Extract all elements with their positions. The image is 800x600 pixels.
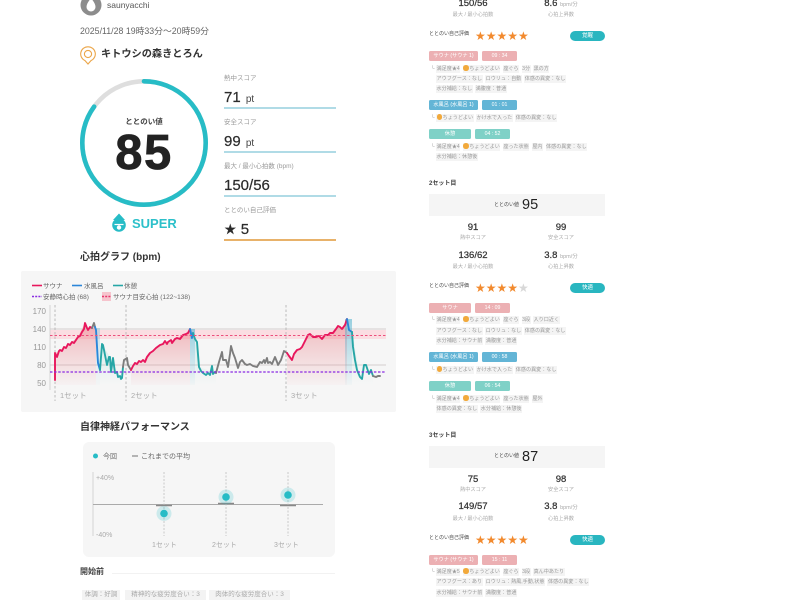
panel: set 1 details: ちょうどよい (469, 66, 500, 72)
panel: set 1 details: 体感の異変：なし (516, 115, 557, 121)
panel: set 1 details: └ (431, 66, 435, 72)
panel: set 1 details: 座ぐら (503, 66, 519, 72)
y axis labels (33, 307, 47, 388)
badge: SUPER rank: SUPER (132, 216, 177, 231)
tags: condition before start: 体調：好調 (85, 591, 117, 598)
panel: set 2 details: 休憩 (445, 383, 455, 389)
panel: set 3 details: 心拍上昇数 (548, 516, 574, 522)
panel: set 2 details: 06 : 54 (485, 383, 500, 389)
y axis labels: 170 (33, 307, 47, 316)
panel: set 3 details: └ (431, 569, 435, 575)
panel: set 3 details: 満足度★5 (437, 569, 460, 575)
heading: autonomic nerve performance: 自律神経パフォーマンス (80, 422, 190, 433)
chart legend: サウナ (43, 282, 62, 290)
chart legend (93, 452, 190, 460)
chart legend: 安静時心拍 (68) (43, 292, 89, 301)
score: 熱中スコア (224, 74, 336, 109)
panel: set 3 details: 快適 (582, 536, 593, 542)
score: 安全スコア: 安全スコア (224, 119, 256, 126)
panel: set 1 details: 満足度★4 (437, 66, 460, 72)
panel: set 1 details: 04 : 52 (485, 131, 500, 137)
panel: set 2 details: ロウリュ：なし (486, 328, 521, 334)
y axis labels: 110 (33, 343, 47, 352)
panel: set 1 details: 水分補給：休憩後 (436, 154, 477, 160)
score: 熱中スコア: 熱中スコア (224, 75, 256, 82)
panel: set 1 details: 3分 (522, 66, 530, 72)
panel: set 2 details: ちょうどよい (469, 317, 500, 323)
panel: set 3 details: 3.8 bpm/分 (544, 501, 578, 512)
panel: set 1 details: 体感の異変：なし (546, 144, 587, 150)
panel: set 3 details: ととのい値 (494, 453, 519, 459)
panel: set 2 details: 満腹度：普通 (486, 338, 516, 344)
panel: set 2 details: 136/62 (458, 250, 488, 261)
panel: set 3 details: 真ん中あたり (534, 569, 564, 575)
panel: set 1 details: ちょうどよい (443, 115, 473, 121)
panel: set 1 details: 満足度★4 (437, 144, 460, 150)
panel: set 3 details: 98 (556, 474, 566, 485)
panel: set 2 details: 水風呂 (水風呂 1) (433, 354, 474, 360)
score: self rating: ★ 5 (224, 221, 249, 238)
panel: set 2 details: └ (431, 396, 435, 402)
panel: autonomic performance chart (83, 442, 335, 557)
y axis labels: 140 (33, 325, 47, 334)
score: self rating (224, 206, 336, 241)
panel: set 1 details: └ (431, 115, 435, 121)
score: 熱中スコア: 71 pt (224, 89, 254, 106)
score: max/min heart rate: 最大 / 最小心拍数 (bpm) (224, 163, 294, 170)
panel: set 2 details: 体感の異変：なし (436, 406, 477, 412)
panel: set 3 details: 15 : 11 (492, 557, 507, 563)
panel: set 2 details: 99 (556, 222, 566, 233)
panel: set 1 details (429, 0, 605, 161)
panel: set 3 details: ロウリュ：熱風,手動,状態 (486, 579, 544, 585)
panel: set 3 details: サウナ (サウナ 1) (433, 557, 474, 563)
panel: set 3 details: 3セット目 (429, 433, 456, 439)
area fills under sauna segments (55, 319, 373, 385)
panel: set 2 details: 14 : 09 (485, 305, 500, 311)
panel: set 2 details: 心拍上昇数 (548, 264, 574, 270)
panel: set 2 details: 3.8 bpm/分 (544, 250, 578, 261)
set labels: 3セット (291, 391, 318, 400)
panel: set 2 details: 最大 / 最小心拍数 (453, 264, 493, 270)
panel: set 1 details: ととのい自己評価 (429, 31, 469, 37)
chart legend: これまでの平均 (141, 452, 190, 460)
score: 安全スコア (224, 118, 336, 153)
panel: set 2 details: アウフグース：なし (436, 328, 482, 334)
panel: set 2 details: 91 (468, 222, 478, 233)
panel: set 1 details: 黒の方 (534, 66, 549, 72)
panel: set 3 details: 75 (468, 474, 478, 485)
score: 安全スコア: 99 pt (224, 133, 254, 150)
panel: set 1 details: 01 : 01 (492, 102, 507, 108)
panel: set 2 details: 3段 (522, 317, 530, 323)
panel: set 1 details: 満腹度：普通 (476, 86, 506, 92)
score: max/min heart rate (224, 162, 336, 197)
axis labels: -40% (96, 532, 112, 539)
panel: set 2 details: サウナ (442, 305, 458, 311)
gauge: overall score 85: 85 (115, 126, 173, 180)
panel: set 1 details: アウフグース：なし (436, 76, 482, 82)
gauge: overall score 85: ととのい値 (125, 117, 163, 126)
gauge: overall score 85 (80, 79, 208, 207)
panel: set 3 details: ★★★★★ (475, 532, 529, 546)
panel: set 2 details: 入り口近く (534, 317, 559, 323)
panel: set 1 details: 水風呂 (水風呂 1) (433, 102, 474, 108)
badge: SUPER rank (112, 214, 177, 232)
panel: set 1 details: 休憩 (445, 131, 455, 137)
tags: condition before start (82, 590, 290, 600)
tags: condition before start: 肉体的な疲労度合い：3 (215, 591, 284, 598)
panel: set 3 details: 3段 (522, 569, 530, 575)
axis labels: 1セット (152, 541, 177, 549)
panel: set 3 details: 最大 / 最小心拍数 (453, 516, 493, 522)
axis labels: +40% (96, 475, 114, 482)
panel: set 2 details: 安全スコア (548, 235, 574, 241)
panel: set 3 details: 体感の異変：なし (548, 579, 589, 585)
set labels: 1セット (60, 391, 87, 400)
target heart rate band (50, 330, 386, 339)
panel: set 1 details: ちょうどよい (469, 144, 500, 150)
score: max/min heart rate: 150/56 (224, 177, 270, 194)
panel: set 1 details: 体感の異変：なし (525, 76, 566, 82)
panel: set 1 details: ロウリュ：自動 (486, 76, 521, 82)
panel: set 1 details: └ (431, 144, 435, 150)
axis labels: 2セット (212, 541, 237, 549)
panel: set 3 details (429, 432, 605, 597)
panel: set 3 details: 安全スコア (548, 487, 574, 493)
target and resting dashed lines (50, 334, 386, 336)
panel: set 2 details: 座った状態 (503, 396, 529, 402)
panel: set 2 details: ととのい自己評価 (429, 283, 469, 289)
panel: set 2 details: 屋外 (532, 396, 543, 402)
panel: set 2 details: 水分補給：休憩後 (481, 406, 522, 412)
panel: set 2 details: 00 : 58 (492, 354, 507, 360)
panel: set 3 details: 87 (522, 448, 538, 464)
panel: set 2 details: └ (431, 317, 435, 323)
y axis labels: 50 (37, 379, 47, 388)
panel: set 3 details: 149/57 (458, 501, 488, 512)
axis labels: 3セット (274, 541, 299, 549)
panel: set 2 details: ちょうどよい (469, 396, 500, 402)
axis labels (96, 475, 299, 549)
score: self rating: ととのい自己評価 (224, 207, 276, 214)
heading: heart rate graph: 心拍グラフ (bpm) (80, 252, 161, 263)
heart rate lines (55, 319, 380, 380)
average markers (156, 504, 296, 506)
panel: set 3 details: 水分補給：サウナ前 (436, 590, 482, 596)
panel: set 3 details: ちょうどよい (469, 569, 500, 575)
panel: set 1 details: 水分補給：なし (436, 86, 472, 92)
panel: set 1 details: かけ水で入った (477, 115, 512, 121)
panel: set 2 details: 体感の異変：なし (525, 328, 566, 334)
panel: set 2 details: ★★★★★ (475, 280, 529, 294)
panel: set 1 details: サウナ (サウナ 1) (433, 53, 474, 59)
user name: saunyacchi (107, 0, 150, 10)
panel: set 3 details: ととのい自己評価 (429, 535, 469, 541)
icon: venue pin (80, 46, 96, 65)
panel: set 1 details: ★★★★★ (475, 28, 529, 42)
panel: set 2 details: 熱中スコア (460, 235, 486, 241)
panel: set 2 details: 満足度★4 (437, 317, 460, 323)
panel: set 2 details: ととのい値 (494, 202, 519, 208)
panel: set 2 details: ちょうどよい (443, 367, 473, 373)
y axis labels: 80 (37, 361, 47, 370)
panel: set 2 details: 水分補給：サウナ前 (436, 338, 482, 344)
set labels (60, 391, 318, 400)
chart legend (32, 281, 190, 301)
user avatar (80, 0, 102, 16)
set labels: 2セット (131, 391, 158, 400)
panel: set 1 details: 09 : 34 (492, 53, 507, 59)
panel: set 2 details (429, 180, 605, 413)
panel: set 3 details: アウフグース：あり (436, 579, 482, 585)
date and time: 2025/11/28 19時33分～20時59分 (80, 26, 209, 36)
heading: before start: 開始前 (80, 567, 104, 576)
panel: set 2 details: 座ぐら (503, 317, 519, 323)
panel: set 1 details: 覚醒 (582, 32, 593, 38)
panel: set 2 details: 95 (522, 197, 538, 213)
chart legend: 水風呂 (84, 281, 104, 290)
panel: heart rate graph (21, 271, 396, 412)
chart legend: 休憩 (124, 281, 138, 290)
panel: set 2 details: 満足度★4 (437, 396, 460, 402)
chart legend: サウナ目安心拍 (122~138) (113, 292, 190, 301)
panel: set 2 details: └ (431, 367, 435, 373)
tags: condition before start: 精神的な疲労度合い：3 (131, 591, 200, 598)
panel: set 1 details: 心拍上昇数 (548, 12, 574, 18)
panel: set 3 details: 熱中スコア (460, 487, 486, 493)
panel: set 2 details: 快適 (582, 284, 593, 290)
panel: set 2 details: 2セット目 (429, 181, 456, 187)
chart legend: 今回 (103, 452, 117, 460)
panel: set 1 details: 屋内 (532, 144, 543, 150)
today's markers (156, 488, 296, 521)
panel: set 3 details: 満腹度：普通 (486, 590, 516, 596)
panel: set 1 details: 座った状態 (503, 144, 529, 150)
panel: set 2 details: かけ水で入った (477, 367, 512, 373)
panel: set 3 details: 座ぐら (503, 569, 519, 575)
panel: set 2 details: 体感の異変：なし (516, 367, 557, 373)
panel: set 1 details: 最大 / 最小心拍数 (453, 12, 493, 18)
venue name: キトウシの森きとろん (101, 49, 203, 60)
